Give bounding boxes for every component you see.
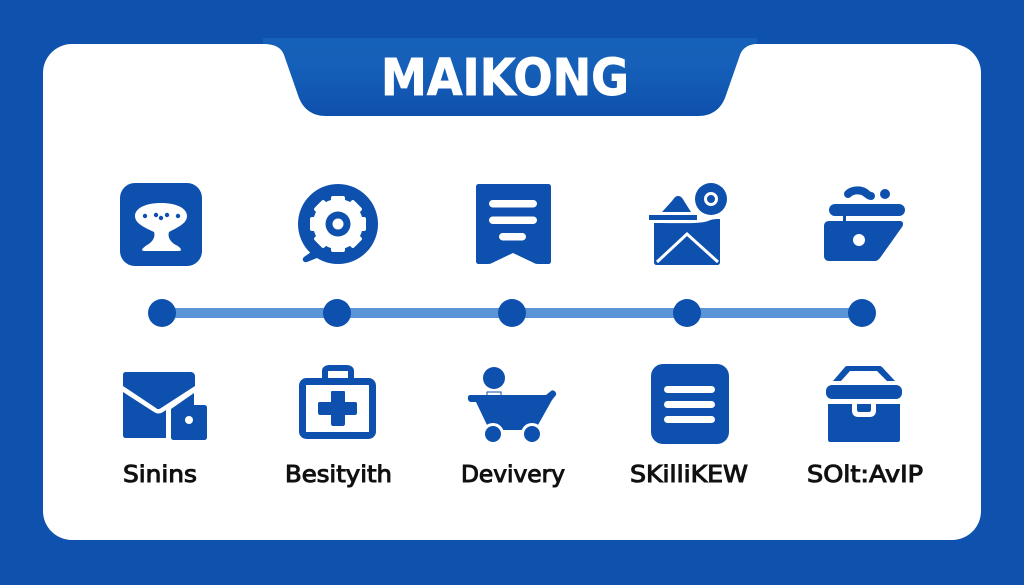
title banner [263,38,757,116]
icon: envelope and wallet [123,372,207,440]
labels [123,462,923,488]
icon: list tile [651,364,729,444]
label: Devivery: Devivery [461,462,565,488]
icon: speech mushroom tile [120,183,202,266]
icon: medical kit [302,368,372,436]
label: Sinins: Sinins [123,462,197,488]
label: Besityith: Besityith [285,462,392,488]
icon: cart with person [468,367,556,444]
icon: toolbox [826,366,902,442]
label: SKilliKEW: SKilliKEW [630,462,748,488]
title: MAIKONG [381,49,629,108]
bottom icon row [123,364,902,444]
panel: white card [43,44,981,540]
timeline [148,299,876,327]
icon: case with lid [824,189,905,261]
icon: gear bubble [298,184,378,264]
icon: open box with disc [649,183,727,265]
top icon row [120,183,905,266]
timeline dots [148,299,876,327]
label: SOlt:AvIP: SOlt:AvIP [807,462,923,488]
icon: document ribbon [476,184,551,264]
